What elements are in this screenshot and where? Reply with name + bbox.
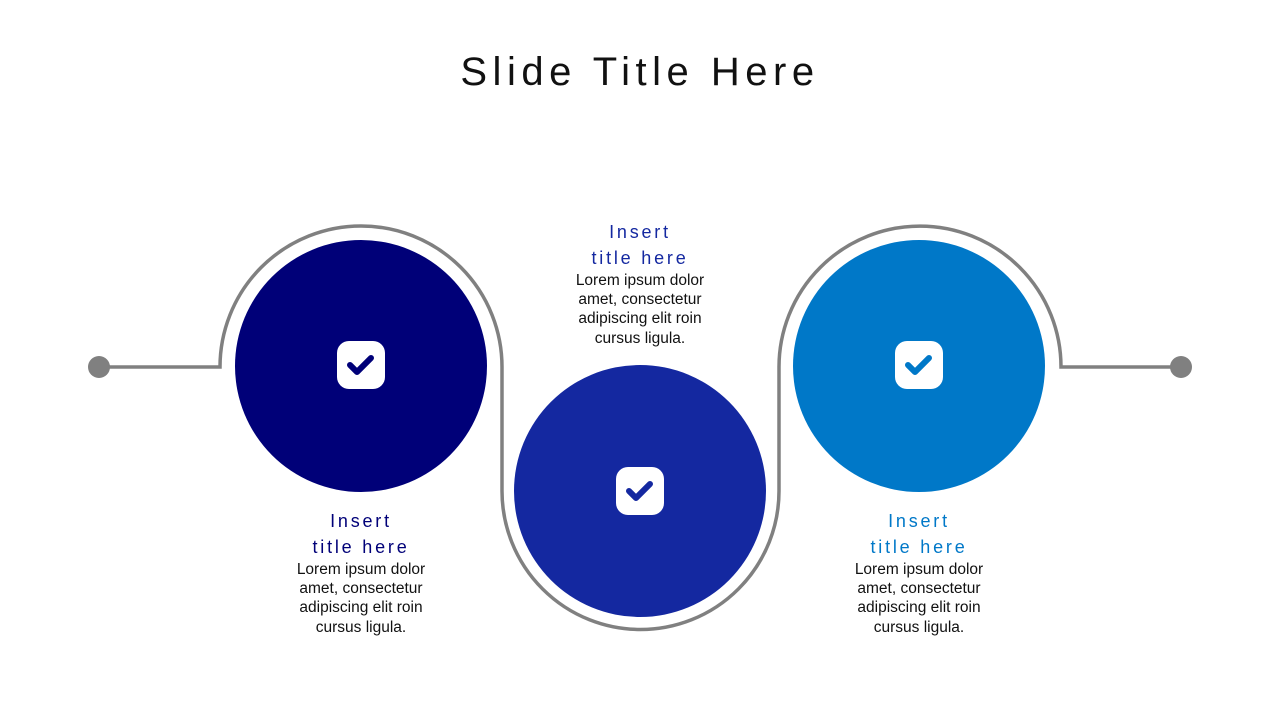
text block 2: amet, consectetur [578, 291, 702, 308]
text block 1: cursus ligula. [316, 619, 406, 636]
text block 3: adipiscing elit roin [857, 599, 981, 616]
text block 2: title here [591, 248, 689, 268]
text block 3 [855, 511, 983, 636]
connector path [88, 226, 1192, 630]
title: Slide Title Here [460, 50, 820, 94]
text block 2: Lorem ipsum dolor [576, 272, 704, 289]
text block 3: cursus ligula. [874, 619, 964, 636]
text block 1: Lorem ipsum dolor [297, 561, 425, 578]
text block 3: title here [870, 537, 968, 557]
text block 2 [576, 222, 704, 347]
text block 2: Insert [609, 222, 671, 242]
text block 1 [297, 511, 425, 636]
text block 3: Lorem ipsum dolor [855, 561, 983, 578]
icon: check 2 [616, 467, 664, 515]
text block 1: title here [312, 537, 410, 557]
text block 1: adipiscing elit roin [299, 599, 423, 616]
text block 2: cursus ligula. [595, 330, 685, 347]
icon: check 3 [895, 341, 943, 389]
circle 3 [793, 240, 1045, 492]
icon: check 1 [337, 341, 385, 389]
text block 3: Insert [888, 511, 950, 531]
circle 2 [514, 365, 766, 617]
circle 1 [235, 240, 487, 492]
text block 2: adipiscing elit roin [578, 310, 702, 327]
text block 1: amet, consectetur [299, 580, 423, 597]
text block 1: Insert [330, 511, 392, 531]
text block 3: amet, consectetur [857, 580, 981, 597]
